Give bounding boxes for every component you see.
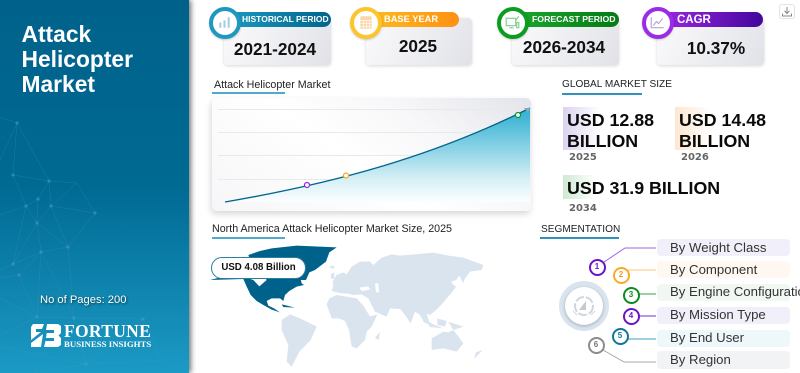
header ribbon xyxy=(374,12,459,27)
header ribbon xyxy=(666,12,763,27)
world map xyxy=(210,246,484,366)
segment number 2 xyxy=(612,266,630,284)
metric value: USD 14.48 xyxy=(679,110,766,130)
value: 2025 xyxy=(399,36,437,56)
header ribbon: FORECAST PERIOD xyxy=(532,14,616,24)
segment row: by region xyxy=(657,351,790,369)
card body xyxy=(366,18,472,65)
segment number 3: 3 xyxy=(629,290,633,298)
card body xyxy=(512,18,619,65)
logo mark xyxy=(31,324,61,347)
metric tint xyxy=(563,107,600,150)
heading: global market size: GLOBAL MARKET SIZE xyxy=(562,79,672,90)
segment label: by region: By Region xyxy=(670,352,731,367)
panel: area chart xyxy=(212,98,531,211)
segment row: by end user xyxy=(657,330,790,347)
title xyxy=(22,21,133,97)
marker: 2025 xyxy=(304,182,310,188)
header ribbon: HISTORICAL PERIOD xyxy=(242,14,329,24)
segment label: by mission type: By Mission Type xyxy=(670,307,766,322)
metric value xyxy=(679,110,766,151)
metric: 2026 market size xyxy=(675,107,766,163)
metric: 2025 market size xyxy=(563,107,654,163)
card body xyxy=(224,18,331,65)
metric year: 2034 xyxy=(569,203,597,214)
header ribbon: CAGR xyxy=(677,14,711,26)
segment label: by component: By Component xyxy=(670,262,757,277)
stat card: base year xyxy=(349,7,474,68)
arrow tip xyxy=(524,108,530,113)
hub circle xyxy=(559,281,609,331)
title: Helicopter xyxy=(22,46,133,72)
heading: attack helicopter market chart: Attack Helicopter Market xyxy=(214,79,330,91)
callout: north america value: USD 4.08 Billion xyxy=(221,262,296,273)
segment row: by engine configuration xyxy=(657,284,790,301)
segment number 3 xyxy=(622,286,640,304)
icon ring: bar chart xyxy=(209,7,241,39)
value: 2021-2024 xyxy=(234,39,316,59)
segment row: by component xyxy=(657,261,790,278)
segment number 4: 4 xyxy=(629,310,633,320)
segment label: by weight class: By Weight Class xyxy=(670,240,766,255)
value: 10.37% xyxy=(687,38,745,58)
metric year: 2025 xyxy=(569,152,597,163)
logo tagline: BUSINESS INSIGHTS xyxy=(64,339,151,349)
marker: 2026 xyxy=(344,173,348,178)
logo wordmark: FORTUNE xyxy=(64,321,151,341)
segment number 1 xyxy=(588,258,606,276)
header ribbon xyxy=(233,12,331,27)
icon: download button xyxy=(779,4,795,19)
metric year: 2026 xyxy=(681,152,709,163)
segment label: by end user: By End User xyxy=(670,330,744,345)
value: 2026-2034 xyxy=(523,37,605,57)
stat card: CAGR xyxy=(641,7,766,68)
metric value: USD 31.9 BILLION xyxy=(567,178,720,198)
icon ring: growth screen xyxy=(497,7,529,39)
segment number 1: 1 xyxy=(595,262,599,270)
icon ring: growth chart xyxy=(642,7,674,39)
segmentation diagram xyxy=(559,248,656,362)
segment number 2: 2 xyxy=(619,270,623,278)
line chart with shaded area xyxy=(218,107,531,203)
logo: Fortune Business Insights xyxy=(31,321,151,349)
header ribbon xyxy=(521,12,619,27)
network pattern background xyxy=(0,116,161,373)
connector lines xyxy=(603,248,656,362)
metric value: USD 12.88 xyxy=(567,110,654,130)
segment row: by weight class xyxy=(657,239,790,256)
metric value xyxy=(567,110,654,151)
card body xyxy=(657,18,764,65)
map: inland seas xyxy=(359,283,379,292)
map: North America highlighted xyxy=(210,246,337,312)
marker: 2034 xyxy=(516,112,520,118)
segment number 5 xyxy=(612,328,628,344)
header ribbon: BASE YEAR xyxy=(384,14,438,24)
hub icon xyxy=(565,287,603,325)
metric: 2034 market size xyxy=(563,175,720,214)
segment row: by mission type xyxy=(657,307,790,324)
metric value: BILLION xyxy=(679,131,750,151)
segment number 6: 6 xyxy=(594,340,598,348)
segment number 4 xyxy=(622,308,640,324)
title: Market xyxy=(22,71,95,97)
icon ring: calendar xyxy=(350,7,382,39)
callout: north america value xyxy=(211,257,306,279)
segment number 5: 5 xyxy=(618,330,622,340)
title: Attack xyxy=(22,21,91,47)
segment number 6 xyxy=(588,336,604,354)
metric value: BILLION xyxy=(567,131,638,151)
metric tint xyxy=(563,175,596,199)
heading: north america market size: North America Attack Helicopter Market Size, 2025 xyxy=(212,223,452,235)
panel: left sidebar xyxy=(0,0,189,373)
metric tint xyxy=(675,107,712,150)
heading: segmentation: SEGMENTATION xyxy=(541,224,620,235)
page count: No of Pages: 200 xyxy=(40,294,126,306)
stat card: historical period xyxy=(208,7,332,68)
stat card: forecast period xyxy=(496,7,620,68)
